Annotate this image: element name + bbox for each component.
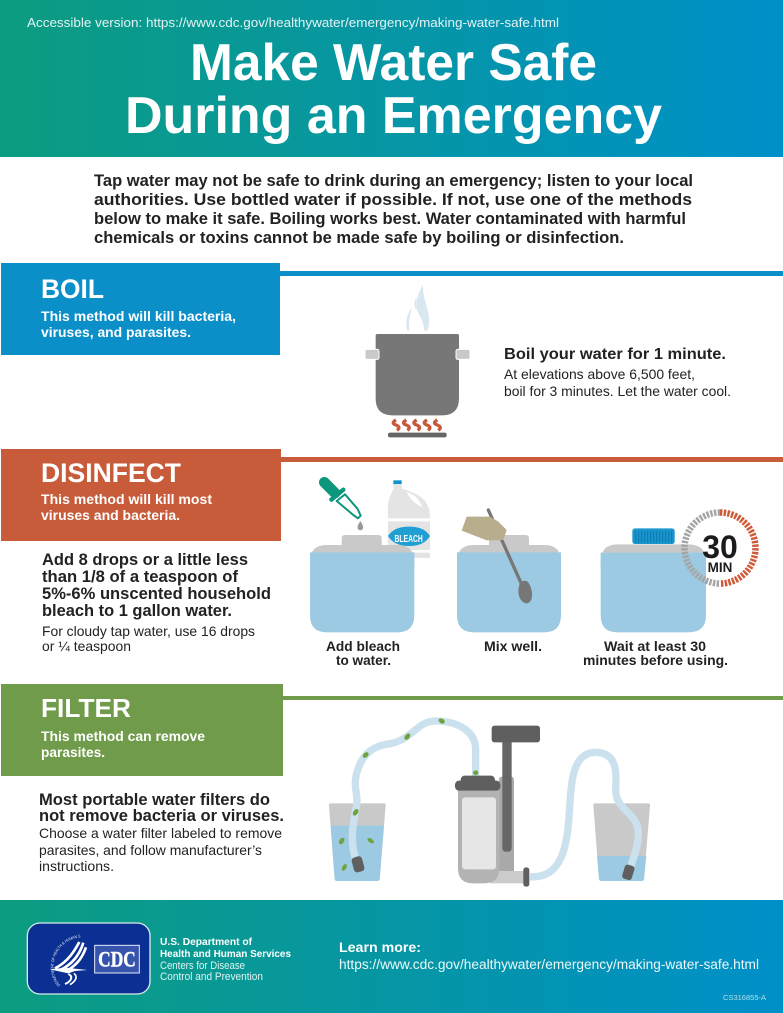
agency name: Centers for Disease bbox=[160, 960, 245, 972]
icon: 30 minute timer: 30 bbox=[702, 529, 738, 565]
caption: add bleach bbox=[326, 638, 400, 668]
caption: add bleach: Add bleach bbox=[326, 638, 400, 654]
title bbox=[125, 34, 662, 145]
boil instructions: At elevations above 6,500 feet, bbox=[504, 366, 695, 382]
filter instructions: Choose a water filter labeled to remove bbox=[39, 825, 282, 841]
intro text: authorities. Use bottled water if possible. If not, use one of the methods bbox=[94, 191, 692, 209]
caption: wait bbox=[583, 638, 728, 668]
disinfect instructions: For cloudy tap water, use 16 drops bbox=[42, 624, 255, 639]
caption: wait: Wait at least 30 bbox=[604, 638, 706, 654]
tube ends bbox=[351, 856, 635, 881]
footer banner bbox=[0, 900, 783, 1013]
boil heading: BOIL bbox=[41, 274, 104, 304]
disinfect instructions: Add 8 drops or a little less bbox=[42, 551, 248, 569]
boil instructions: boil for 3 minutes. Let the water cool. bbox=[504, 383, 731, 399]
filter instructions bbox=[39, 791, 284, 874]
agency name: Health and Human Services bbox=[160, 948, 291, 960]
filter instructions: Most portable water filters do bbox=[39, 791, 270, 809]
intro text: chemicals or toxins cannot be made safe by boiling or disinfection. bbox=[94, 229, 624, 247]
right cup bbox=[593, 803, 650, 881]
filter instructions: instructions. bbox=[39, 858, 114, 874]
icon: 30 minute timer: MIN bbox=[708, 560, 732, 575]
icon: bleach bottle bbox=[388, 480, 430, 558]
parasites bbox=[338, 717, 478, 872]
agency name bbox=[160, 936, 291, 983]
logo: HHS and CDC: CDC bbox=[98, 946, 136, 971]
agency name: Control and Prevention bbox=[160, 971, 263, 983]
tubes bbox=[352, 721, 638, 877]
filter description: This method can remove bbox=[41, 728, 205, 744]
publication code: CS316855-A bbox=[723, 993, 766, 1002]
icon: jug with cap bbox=[601, 528, 706, 632]
icon: jug with spoon and hand bbox=[457, 510, 561, 632]
disinfect description: This method will kill most bbox=[41, 491, 212, 507]
filter instructions: not remove bacteria or viruses. bbox=[39, 807, 284, 825]
panel: filter bbox=[1, 684, 783, 887]
filter instructions: parasites, and follow manufacturer’s bbox=[39, 842, 262, 858]
disinfect heading: DISINFECT bbox=[41, 458, 181, 488]
caption: wait: minutes before using. bbox=[583, 652, 728, 668]
disinfect description bbox=[41, 491, 212, 523]
disinfect instructions: than 1/8 of a teaspoon of bbox=[42, 568, 239, 586]
left cup bbox=[329, 803, 386, 881]
filter description bbox=[41, 728, 205, 760]
filter body bbox=[455, 776, 529, 887]
icon: 30 minute timer bbox=[685, 512, 755, 584]
boil description: This method will kill bacteria, bbox=[41, 308, 236, 324]
boil instructions: Boil your water for 1 minute. bbox=[504, 346, 726, 363]
intro text: Tap water may not be safe to drink during an emergency; listen to your local bbox=[94, 172, 693, 190]
intro text: below to make it safe. Boiling works best. Water contaminated with harmful bbox=[94, 210, 686, 228]
title: During an Emergency bbox=[125, 87, 662, 145]
learn more: Learn more: bbox=[339, 940, 421, 956]
filter description: parasites. bbox=[41, 744, 105, 760]
caption: add bleach: to water. bbox=[336, 652, 391, 668]
icon: jug with dropper bbox=[310, 482, 414, 632]
icon: boiling pot bbox=[365, 285, 470, 437]
icon: bleach bottle: BLEACH bbox=[394, 534, 423, 545]
disinfect instructions: bleach to 1 gallon water. bbox=[42, 602, 232, 620]
disinfect instructions: 5%-6% unscented household bbox=[42, 585, 271, 603]
filter heading: FILTER bbox=[41, 693, 131, 723]
logo: HHS and CDC bbox=[26, 922, 151, 995]
caption: mix well: Mix well. bbox=[484, 638, 542, 654]
learn more bbox=[339, 940, 759, 972]
panel: boil bbox=[1, 263, 783, 437]
boil description: viruses, and parasites. bbox=[41, 324, 191, 340]
agency name: U.S. Department of bbox=[160, 936, 252, 948]
disinfect instructions bbox=[42, 551, 271, 654]
disinfect description: viruses and bacteria. bbox=[41, 507, 180, 523]
intro text bbox=[94, 172, 693, 247]
disinfect instructions: or ¼ teaspoon bbox=[42, 639, 131, 654]
header banner bbox=[0, 0, 783, 157]
icon: water filter pump setup bbox=[329, 717, 650, 887]
title: Make Water Safe bbox=[190, 34, 597, 92]
boil description bbox=[41, 308, 236, 340]
learn more: https://www.cdc.gov/healthywater/emergency/making-water-safe.html bbox=[339, 957, 759, 972]
logo: HHS and CDC: DEPARTMENT OF HEALTH & HUMAN SERVICES USA bbox=[50, 934, 80, 987]
accessible version link: Accessible version: https://www.cdc.gov/healthywater/emergency/making-water-safe.html bbox=[27, 15, 559, 30]
boil instructions bbox=[504, 346, 731, 399]
pump bbox=[492, 726, 540, 873]
panel: disinfect bbox=[1, 449, 783, 668]
